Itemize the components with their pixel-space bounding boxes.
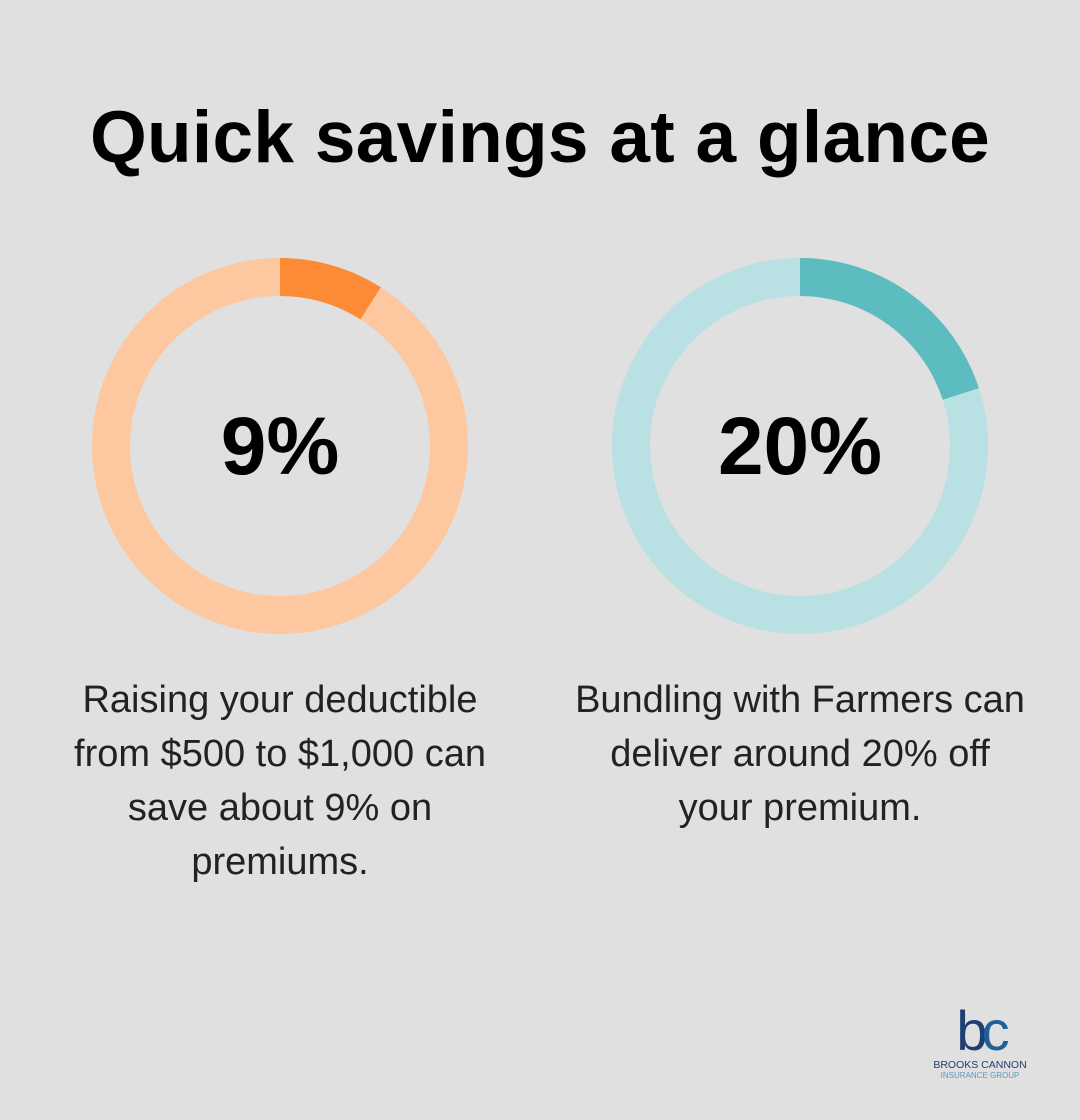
donut: 9%: 9% (221, 401, 339, 492)
caption: bundling (575, 679, 1025, 829)
caption: deductible: from $500 to $1,000 can (74, 733, 486, 775)
caption: deductible (74, 679, 486, 883)
caption: deductible: premiums. (191, 841, 369, 883)
title: Quick savings at a glance (90, 97, 990, 178)
caption: bundling: your premium. (679, 787, 921, 829)
logo: INSURANCE GROUP (941, 1071, 1019, 1080)
caption: bundling: deliver around 20% off (610, 733, 990, 775)
logo: BROOKS CANNON (933, 1059, 1027, 1071)
donut: 20% (612, 258, 988, 634)
caption: deductible: save about 9% on (128, 787, 432, 829)
caption: deductible: Raising your deductible (82, 679, 478, 721)
logo (933, 1002, 1027, 1080)
caption: bundling: Bundling with Farmers can (575, 679, 1025, 721)
donut: 9% (92, 258, 468, 634)
donut: 20%: 20% (718, 401, 882, 492)
